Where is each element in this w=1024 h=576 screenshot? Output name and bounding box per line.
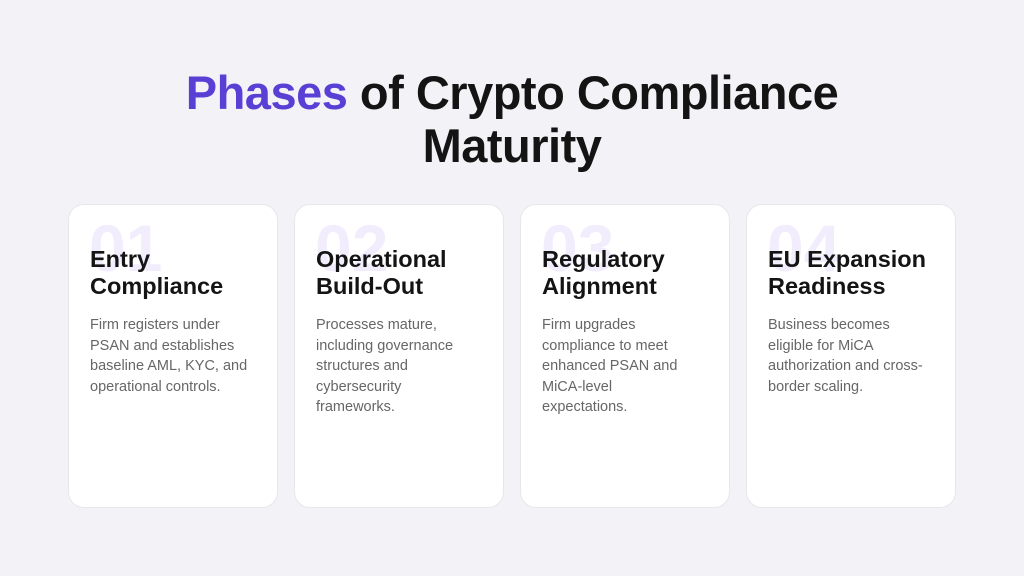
panel: phase 2 [294,204,504,508]
panel: phase 2: Processes mature, [316,317,437,333]
panel: phase 1: Compliance [90,273,223,299]
panel: phase 4: authorization and cross- [768,358,923,374]
panel: phase 4: EU Expansion [768,246,926,272]
panel: phase 2: including governance [316,338,453,354]
panel: phase 1: Entry [90,246,150,272]
panel: phase 2: Build-Out [316,273,423,299]
panel: phase 2: frameworks. [316,399,395,415]
panel: phase 1: PSAN and establishes [90,338,234,354]
panel: phase 3: MiCA-level [542,378,612,394]
panel: phase 1: Firm registers under [90,317,220,333]
panel: phase 4: eligible for MiCA [768,338,874,354]
panel: phase 3: Regulatory [542,246,665,272]
title: Maturity [423,119,601,172]
title: Phases of Crypto Compliance [186,66,838,119]
panel: phase 1 [68,204,278,508]
panel: phase 3: enhanced PSAN and [542,358,677,374]
panel: phase 3: 03 [541,211,614,285]
panel: phase 3: expectations. [542,399,627,415]
panel: phase 4 [746,204,956,508]
panel: phase 2: structures and [316,358,408,374]
panel: phase 2: 02 [315,211,388,285]
panel: phase 1: baseline AML, KYC, and [90,358,247,374]
panel: phase 3: Firm upgrades [542,317,635,333]
panel: phase 3: Alignment [542,273,657,299]
panel: phase 1: operational controls. [90,378,221,394]
panel: phase 4: Business becomes [768,317,890,333]
title [186,66,838,172]
panel: phase 4: Readiness [768,273,886,299]
panel: phase 4: 04 [767,211,840,285]
panel: phase 3 [520,204,730,508]
panel: phase 2: Operational [316,246,447,272]
panel: phase 2: cybersecurity [316,378,401,394]
panel: phase 4: border scaling. [768,378,863,394]
panel: phase 3: compliance to meet [542,338,668,354]
panel: phase 1: 01 [89,211,162,285]
